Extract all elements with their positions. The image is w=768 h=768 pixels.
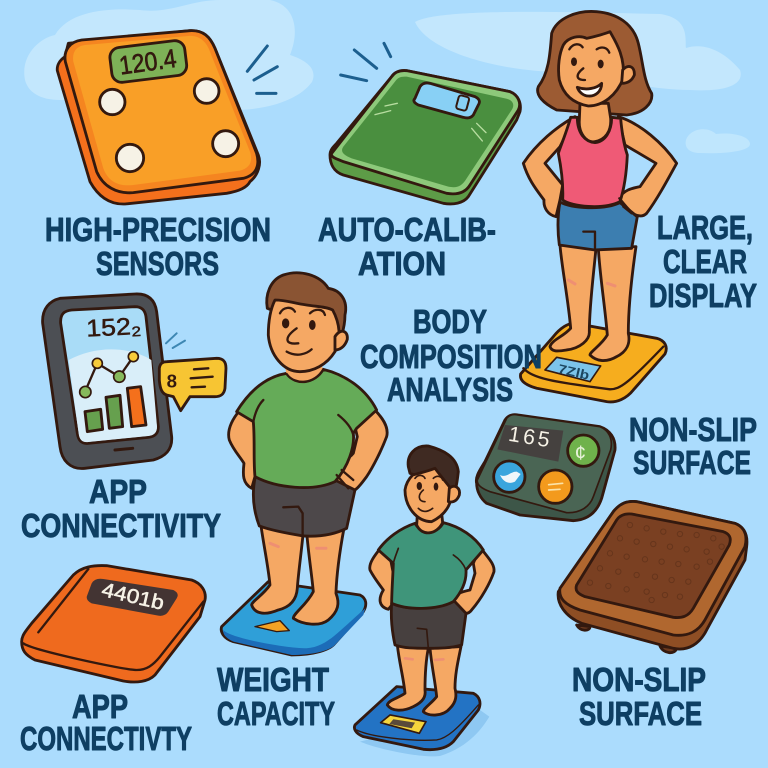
hand fingers <box>337 470 353 488</box>
right arm <box>331 408 387 492</box>
label line: ANALYSIS <box>387 371 513 408</box>
blue scale <box>354 687 480 750</box>
label: body composition analysis <box>360 303 542 408</box>
smile <box>577 83 602 96</box>
hair <box>267 273 346 335</box>
label line: SENSORS <box>96 245 219 282</box>
panel: man on blue scale <box>221 273 387 655</box>
shorts <box>391 600 466 648</box>
chart dot <box>80 386 91 398</box>
label line: COMPOSITION <box>360 338 542 375</box>
display digit <box>456 95 470 111</box>
shirt folds <box>393 548 466 570</box>
scale display <box>381 715 426 733</box>
scale rim <box>223 608 365 655</box>
ear <box>448 486 460 502</box>
label: weight capacity <box>217 661 335 732</box>
bar chart <box>85 387 146 432</box>
scale marker <box>255 621 289 632</box>
inner surface <box>342 77 513 187</box>
left leg <box>550 245 596 351</box>
blue button <box>494 461 525 492</box>
face <box>559 32 624 106</box>
ear <box>335 331 347 350</box>
textured pad <box>576 514 730 618</box>
neck and collar <box>417 513 443 533</box>
hair <box>538 11 652 115</box>
panel: auto-calibration scale <box>330 43 520 204</box>
right arm <box>618 117 677 216</box>
line chart <box>80 352 138 398</box>
left leg <box>252 523 303 613</box>
display digits: 7Zlb <box>557 362 591 383</box>
shorts <box>253 477 355 536</box>
chart line <box>85 357 133 392</box>
label: non-slip surface upper <box>629 411 757 481</box>
scale body <box>57 31 260 204</box>
sensor pad <box>116 144 144 172</box>
panel: phone app <box>43 294 226 468</box>
knee marks <box>270 543 326 548</box>
eye <box>282 318 289 328</box>
label: auto-calibration <box>318 211 496 282</box>
shorts <box>558 202 637 250</box>
chart dot <box>114 371 125 382</box>
face <box>268 300 339 372</box>
display <box>87 579 178 616</box>
panel: orange scale with readout <box>22 566 205 682</box>
green shirt <box>237 369 377 488</box>
shorts seam <box>283 507 303 535</box>
label line: SURFACE <box>579 695 702 732</box>
home button <box>115 448 133 450</box>
pad bumps <box>587 522 724 603</box>
brows and nose <box>569 44 609 80</box>
bar <box>106 395 123 428</box>
scale rim line <box>523 347 663 389</box>
label line: CONNECTIVITY <box>21 507 221 544</box>
label line: APP <box>72 688 128 725</box>
device top <box>477 415 611 513</box>
label line: NON-SLIP <box>572 661 706 698</box>
knee marks <box>568 280 615 286</box>
shorts seam <box>583 232 595 248</box>
reading: 165 <box>507 422 554 452</box>
screen <box>497 425 563 462</box>
scale top <box>65 31 258 193</box>
green button icon: ¢ <box>575 441 586 464</box>
knee marks <box>405 658 443 660</box>
yellow scale <box>520 323 666 402</box>
neck <box>285 362 323 381</box>
eye <box>598 60 604 68</box>
display reading: 120.4 <box>117 43 178 81</box>
phone screen <box>61 307 158 443</box>
panel: boy on blue scale <box>354 446 494 756</box>
chat bubble <box>159 358 226 411</box>
label line: HIGH-PRECISION <box>45 211 271 248</box>
label: high-precision sensors <box>45 211 271 282</box>
scale rim <box>560 501 746 635</box>
orange button marks <box>549 483 563 490</box>
motion marks <box>247 46 277 93</box>
eyes <box>571 57 577 66</box>
sensor pad <box>213 131 239 157</box>
left arm <box>229 410 255 488</box>
neck and chest <box>579 103 611 142</box>
scale top <box>331 71 520 194</box>
scale display <box>545 357 601 382</box>
shirt fold <box>253 400 353 435</box>
label: app connectivty bottom <box>20 688 192 757</box>
left arm <box>523 117 575 217</box>
orange button <box>539 470 572 503</box>
scale base <box>558 501 747 649</box>
neck collar line <box>287 369 323 382</box>
eye <box>309 320 316 330</box>
label: large, clear display <box>649 209 757 314</box>
eye <box>417 482 422 490</box>
label line: CAPACITY <box>217 695 335 732</box>
green shirt <box>378 523 483 608</box>
right leg <box>423 647 461 715</box>
panel: woman on yellow scale <box>520 11 677 402</box>
label line: AUTO-CALIB- <box>318 211 496 248</box>
bubble glyph: 8 <box>167 370 177 391</box>
sensor pad <box>194 79 219 103</box>
label line: ATION <box>358 245 446 282</box>
panel: non-slip brown mat scale <box>558 501 747 653</box>
right leg <box>590 247 636 361</box>
scale feet <box>577 625 677 653</box>
screen reading: 152₂ <box>86 313 142 343</box>
face <box>405 468 451 522</box>
readout: 4401b <box>100 579 166 615</box>
shorts seam <box>417 628 428 648</box>
bar <box>127 387 146 427</box>
ear <box>622 66 634 83</box>
hand <box>619 198 637 217</box>
scale edge lines <box>23 569 203 670</box>
signal marks <box>166 333 185 348</box>
panel: high-precision sensors scale <box>57 31 277 204</box>
sensor pad <box>100 89 125 115</box>
tank top <box>558 117 627 207</box>
label: app connectivity <box>21 473 221 544</box>
display screen <box>389 719 415 728</box>
motion marks <box>341 43 391 81</box>
screen lower panel <box>69 349 157 442</box>
label line: APP <box>89 473 147 510</box>
phone body <box>43 294 172 468</box>
scale shadow <box>360 710 489 756</box>
right arm <box>452 547 494 613</box>
green button <box>568 435 599 466</box>
blue button bird <box>500 472 521 483</box>
scale top highlight <box>73 36 251 185</box>
bar <box>85 409 103 432</box>
left leg <box>387 645 428 710</box>
chart dot <box>128 352 138 362</box>
scale rim line <box>357 705 478 740</box>
label line: BODY <box>413 303 487 340</box>
hair <box>408 446 458 490</box>
blue scale <box>221 582 366 655</box>
display <box>414 83 479 118</box>
brows, nose and mouth <box>280 308 325 355</box>
label line: WEIGHT <box>217 661 329 698</box>
label line: CONNECTIVTY <box>20 720 192 757</box>
right leg <box>293 528 344 624</box>
panel: control panel device <box>476 415 615 521</box>
brows, nose and mouth <box>415 475 443 511</box>
chart dot <box>92 358 102 368</box>
scale body <box>22 566 205 682</box>
weight display <box>109 40 188 83</box>
eye <box>434 483 438 491</box>
glare marks <box>375 103 486 141</box>
device body <box>476 415 615 521</box>
left arm <box>370 547 393 609</box>
bubble text lines <box>191 368 213 387</box>
scale body <box>330 71 520 204</box>
label: non-slip surface lower <box>572 661 706 732</box>
